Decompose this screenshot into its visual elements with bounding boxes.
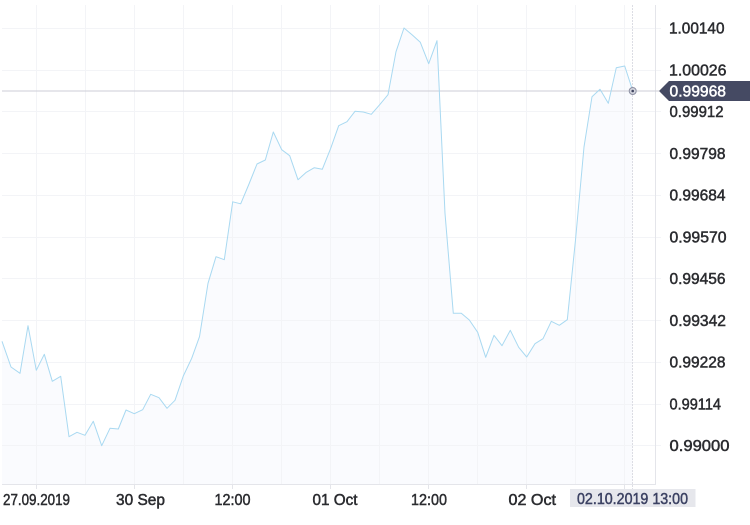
y-axis labels: 0.99684 bbox=[670, 188, 726, 204]
y-axis labels: 0.99342 bbox=[670, 313, 726, 330]
y-axis labels: 0.99114 bbox=[670, 396, 721, 414]
current price tag: 0.99968 bbox=[670, 84, 726, 100]
crosshair date tag: 02.10.2019 13:00 bbox=[577, 491, 688, 508]
x-axis labels: 30 Sep bbox=[116, 492, 165, 509]
price line bbox=[2, 28, 633, 446]
current price marker bbox=[629, 88, 636, 94]
y-axis labels: 0.99000 bbox=[670, 438, 730, 455]
current price tag bbox=[659, 81, 750, 101]
x-axis labels bbox=[3, 492, 557, 509]
y-axis labels: 0.99912 bbox=[670, 104, 724, 121]
crosshair horizontal bbox=[2, 90, 659, 92]
x-axis labels: 01 Oct bbox=[312, 492, 358, 509]
x-axis labels: 12:00 bbox=[214, 492, 251, 509]
y-axis labels: 0.99570 bbox=[670, 230, 727, 246]
x-axis labels: 27.09.2019 bbox=[3, 492, 70, 509]
y-axis labels: 1.00140 bbox=[669, 20, 725, 38]
y-axis labels: 0.99456 bbox=[670, 271, 726, 288]
y-axis labels: 0.99228 bbox=[670, 354, 726, 372]
y-axis labels: 0.99798 bbox=[670, 146, 726, 163]
area fill under price line bbox=[2, 28, 633, 484]
crosshair vertical bbox=[632, 5, 634, 489]
x-axis labels: 02 Oct bbox=[508, 492, 557, 509]
y-axis labels bbox=[669, 20, 730, 455]
x-axis labels: 12:00 bbox=[411, 492, 447, 509]
y-axis labels: 1.00026 bbox=[669, 62, 726, 80]
